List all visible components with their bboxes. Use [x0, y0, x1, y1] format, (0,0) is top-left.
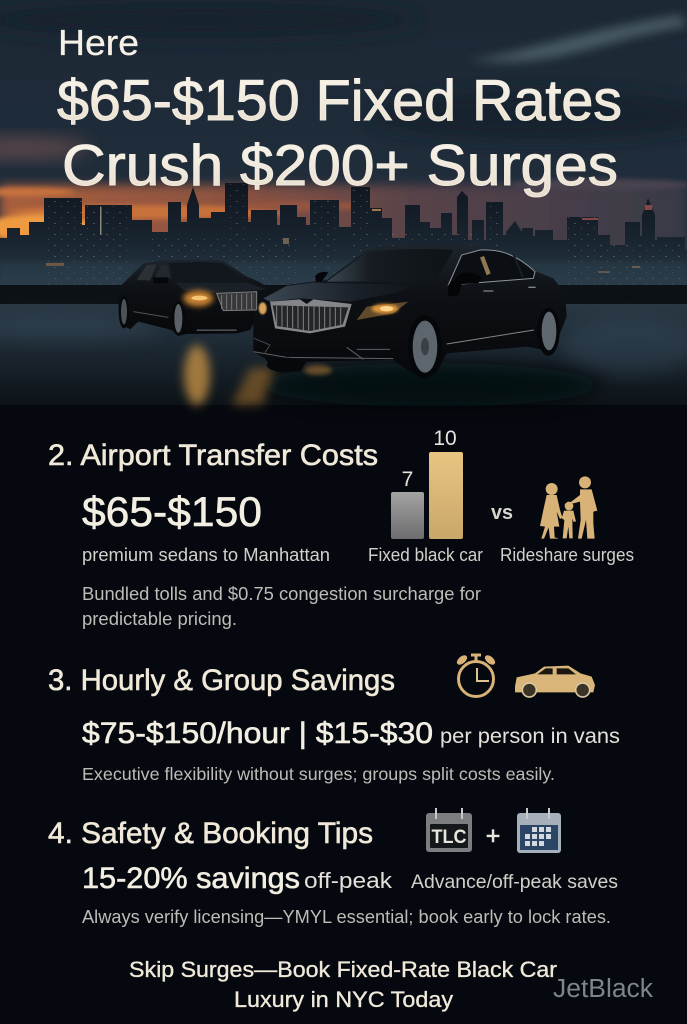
kicker: Here [58, 22, 139, 63]
clouds [0, 2, 687, 158]
description [82, 583, 481, 629]
logo: JetBlack: JetBlack [553, 975, 653, 1003]
icon: TLC calendar: TLC [432, 827, 467, 848]
bar chart [391, 427, 463, 539]
skyline [0, 183, 687, 286]
plus sign: + [486, 822, 500, 850]
chart labels: Fixed black car [368, 545, 483, 565]
headlight reflections [184, 345, 210, 405]
rates: $75-$150/hour | $15-$30 [82, 717, 433, 750]
front car [253, 244, 567, 378]
panel: airport transfer costs [48, 427, 634, 629]
call to action: Skip Surges—Book Fixed-Rate Black Car [129, 957, 558, 982]
price caption: premium sedans to Manhattan [82, 544, 330, 565]
savings: 15-20% savings [82, 862, 300, 895]
advance tip: Advance/off-peak saves [411, 871, 618, 893]
seawall [0, 285, 687, 304]
price: $65-$150 [82, 488, 262, 535]
headline line 1: $65-$150 Fixed Rates [57, 69, 622, 133]
sunset glow [0, 179, 687, 255]
bar chart: 10 [433, 427, 457, 450]
car shadow on wet road [260, 363, 600, 407]
haze [0, 262, 687, 286]
icon: car [515, 666, 595, 697]
description: Always verify licensing—YMYL essential; book early to lock rates. [82, 907, 611, 927]
icon: family [540, 476, 597, 539]
heading: 4. Safety & Booking Tips [48, 817, 373, 850]
bar chart: 7 [402, 468, 413, 491]
panel: hourly and group savings [48, 653, 620, 784]
rates caption: per person in vans [440, 724, 620, 748]
description: predictable pricing. [82, 608, 237, 629]
road [0, 300, 687, 405]
headline line 2: Crush $200+ Surges [62, 134, 618, 198]
panel: airport transfer costs: Rideshare surges [500, 545, 634, 565]
heading: 3. Hourly & Group Savings [48, 664, 395, 697]
panel: safety and booking tips [48, 808, 618, 927]
icon: stopwatch [455, 653, 497, 696]
icon: TLC calendar [426, 808, 472, 852]
hero image: dusk skyline with two black cars [0, 0, 687, 407]
description: Executive flexibility without surges; groups split costs easily. [82, 764, 555, 784]
call to action: Luxury in NYC Today [234, 987, 454, 1012]
heading: 2. Airport Transfer Costs [48, 439, 378, 472]
description: Bundled tolls and $0.75 congestion surcharge for [82, 583, 481, 604]
call to action [129, 957, 558, 1012]
title block [57, 22, 622, 198]
icon: calendar [517, 808, 561, 853]
savings caption: off-peak [304, 868, 393, 893]
rear car [118, 260, 270, 336]
vs label: vs [491, 502, 513, 524]
